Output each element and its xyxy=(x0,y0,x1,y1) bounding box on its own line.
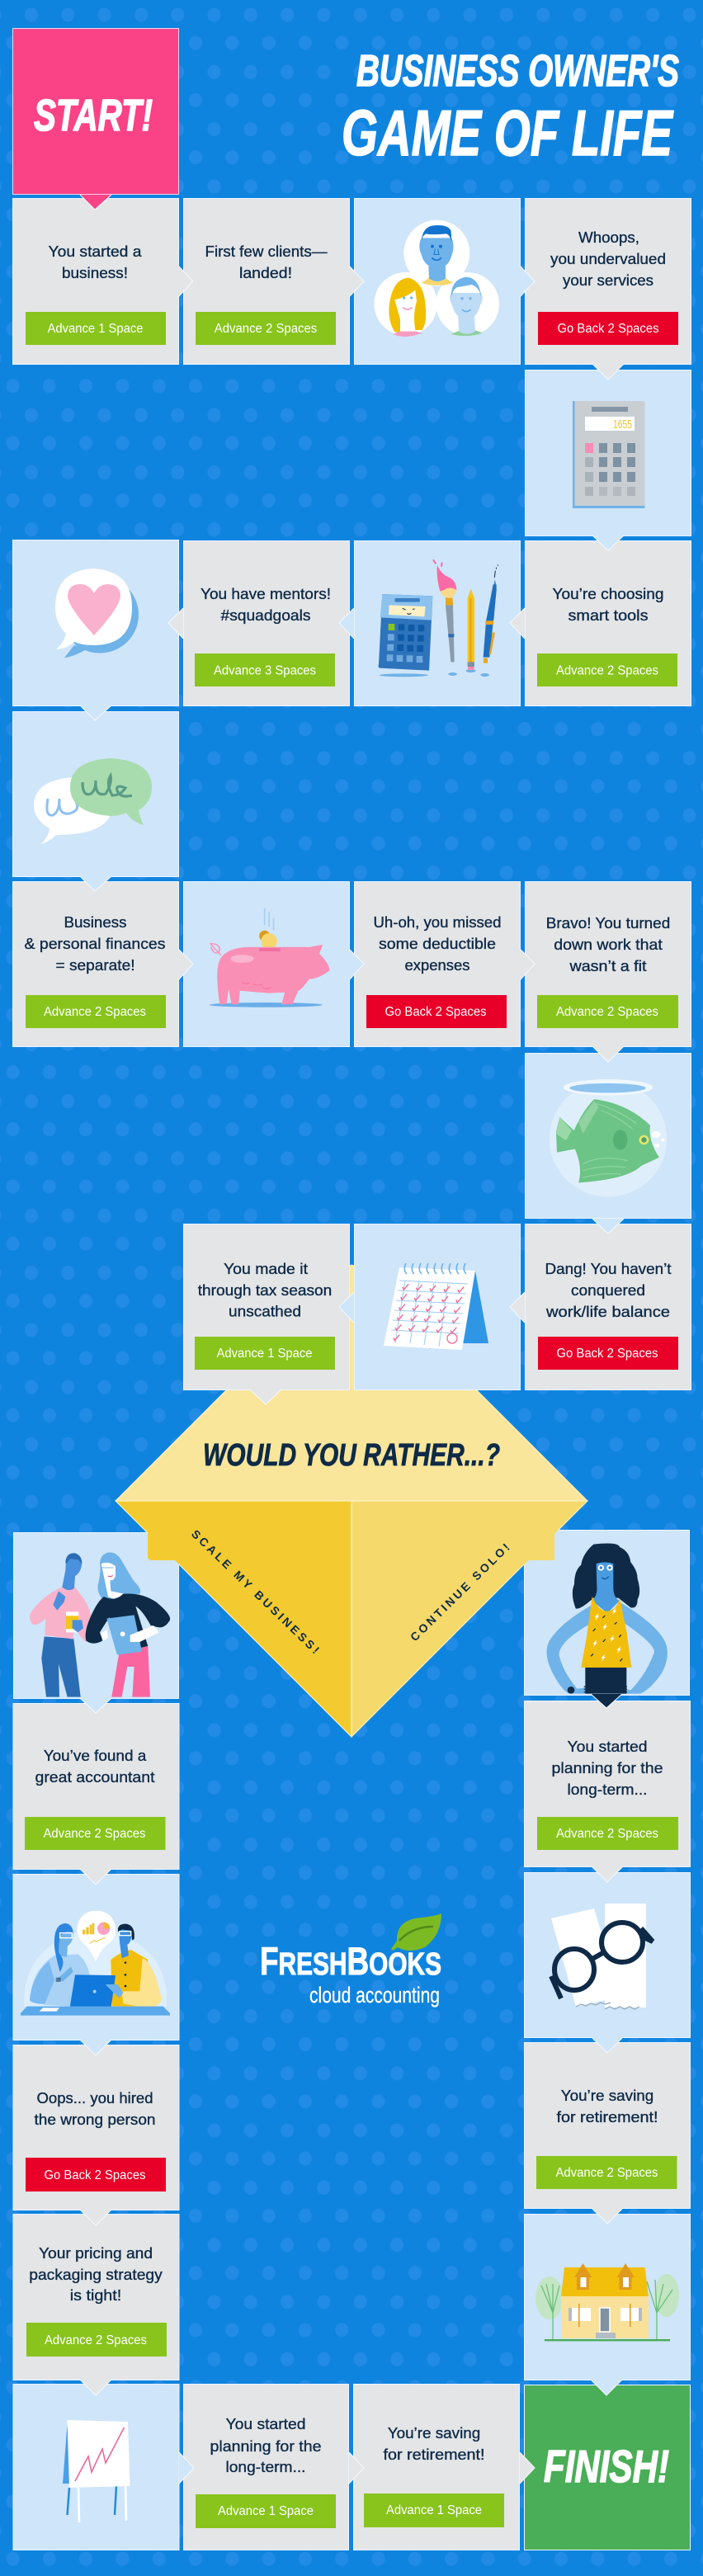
panel: first few clients xyxy=(183,198,350,365)
panel: you started a business: You started a xyxy=(48,243,143,260)
panel: made it through tax season: through tax season xyxy=(198,1282,332,1299)
panel: great accountant: great accountant xyxy=(35,1769,155,1786)
panel: woman illustration xyxy=(525,1530,690,1695)
panel: saving for retirement bottom xyxy=(353,2385,520,2550)
panel: missed deductible expenses xyxy=(355,881,520,1046)
panel: long-term planning: Advance 2 Spaces xyxy=(556,1827,658,1841)
panel: you started a business: business! xyxy=(62,265,128,281)
panel: missed deductible expenses: Uh-oh, you missed xyxy=(373,914,502,931)
panel: pricing and packaging: is tight! xyxy=(70,2287,121,2304)
panel: whoops undervalued xyxy=(525,198,691,365)
panel: logo: cloud accounting xyxy=(309,1983,440,2007)
panel: calculator illustration: 1655 xyxy=(613,418,632,432)
panel: long-term planning bottom: You started xyxy=(226,2416,305,2432)
panel: growth chart illustration xyxy=(13,2385,179,2550)
panel: turned down work: Advance 2 Spaces xyxy=(556,1005,658,1019)
panel: heart bubble illustration xyxy=(13,540,178,706)
panel: made it through tax season xyxy=(183,1224,354,1389)
panel: you started a business xyxy=(13,198,178,365)
panel: finish: FINISH! xyxy=(544,2441,669,2492)
panel: missed deductible expenses: Go Back 2 Spaces xyxy=(385,1005,487,1019)
panel: hired wrong person xyxy=(13,2045,179,2210)
panel: work/life balance: Go Back 2 Spaces xyxy=(556,1347,658,1361)
panel: start: START! xyxy=(34,91,153,140)
panel: turned down work: down work that xyxy=(554,937,663,953)
panel: yellow diamond overlap: SCALE MY BUSINESS! xyxy=(189,1527,322,1656)
title xyxy=(342,46,679,169)
panel: great accountant xyxy=(13,1703,179,1870)
panel: you have mentors: You have mentors! xyxy=(201,586,331,602)
panel: saving for retirement bottom: for retirement! xyxy=(383,2446,485,2463)
panel: logo xyxy=(260,1913,441,2007)
panel: fish bowl illustration xyxy=(525,1053,691,1218)
panel: long-term planning bottom xyxy=(183,2385,348,2550)
panel: long-term planning bottom: long-term... xyxy=(226,2459,305,2475)
panel: long-term planning: long-term... xyxy=(568,1781,647,1798)
panel: business and personal finances: = separate! xyxy=(56,957,135,974)
panel: hired wrong person: the wrong person xyxy=(35,2111,155,2128)
panel: business and personal finances: & personal finances xyxy=(25,936,165,952)
arrows xyxy=(80,195,624,2484)
panel: smart tools illustration xyxy=(355,541,520,706)
panel: great accountant: Advance 2 Spaces xyxy=(43,1827,146,1841)
panel: first few clients: landed! xyxy=(239,265,292,281)
panel: whoops undervalued: Go Back 2 Spaces xyxy=(558,322,659,336)
panel: long-term planning bottom: Advance 1 Space xyxy=(218,2504,314,2518)
panel: saving for retirement bottom: You’re saving xyxy=(388,2425,480,2442)
panel: work/life balance: work/life balance xyxy=(545,1304,670,1320)
panel: saving for retirement xyxy=(525,2043,690,2208)
panel: business and personal finances: Advance 2 Spaces xyxy=(44,1005,146,1019)
panel: made it through tax season: unscathed xyxy=(229,1304,301,1320)
panel: made it through tax season: Advance 1 Space xyxy=(216,1347,312,1361)
panel: hired wrong person: Oops... you hired xyxy=(36,2090,153,2107)
panel: you have mentors: #squadgoals xyxy=(221,607,310,624)
panel: long-term planning bottom: planning for the xyxy=(210,2438,322,2455)
panel: colleagues illustration xyxy=(13,1533,178,1698)
panel: choosing smart tools: smart tools xyxy=(568,607,649,624)
panel: choosing smart tools xyxy=(525,541,691,706)
panel: pricing and packaging: Your pricing and xyxy=(39,2245,153,2262)
panel: would you rather diamond xyxy=(116,1265,587,1737)
panel: long-term planning xyxy=(525,1701,690,1866)
panel: first few clients: First few clients— xyxy=(205,243,327,260)
panel: work/life balance: Dang! You haven’t xyxy=(545,1261,672,1277)
panel: logo: FRESHBOOKS xyxy=(260,1939,441,1983)
panel: missed deductible expenses: some deductible xyxy=(379,936,496,952)
panel: saving for retirement: for retirement! xyxy=(556,2109,658,2125)
panel: work/life balance xyxy=(525,1224,691,1389)
panel: whoops undervalued: Whoops, xyxy=(578,229,639,246)
panel: piggy bank illustration xyxy=(183,881,350,1046)
panel: made it through tax season: You made it xyxy=(224,1261,308,1277)
panel: pricing and packaging: Advance 2 Spaces xyxy=(45,2333,147,2347)
panel: glasses illustration xyxy=(525,1873,690,2038)
panel: calendar illustration xyxy=(355,1224,520,1389)
panel: you started a business: Advance 1 Space xyxy=(48,322,144,336)
panel: pricing and packaging xyxy=(13,2215,179,2380)
panel: pricing and packaging: packaging strategy xyxy=(29,2267,163,2283)
panel: finish xyxy=(525,2385,690,2550)
panel: house illustration xyxy=(525,2215,690,2380)
panel: first few clients: Advance 2 Spaces xyxy=(215,322,317,336)
panel: you have mentors: Advance 3 Spaces xyxy=(214,663,316,678)
panel: whoops undervalued: your services xyxy=(563,272,653,289)
panel: meeting illustration xyxy=(13,1875,179,2040)
panel: calculator illustration xyxy=(525,370,691,536)
panel: work/life balance: conquered xyxy=(571,1282,645,1299)
panel: people illustration xyxy=(355,198,520,365)
panel: choosing smart tools: Advance 2 Spaces xyxy=(556,663,658,678)
panel: turned down work xyxy=(525,881,691,1046)
panel: saving for retirement: Advance 2 Spaces xyxy=(556,2166,658,2180)
panel: long-term planning: planning for the xyxy=(551,1760,663,1776)
panel: would you rather diamond: WOULD YOU RATHER...? xyxy=(203,1438,500,1473)
panel: business and personal finances: Business xyxy=(64,914,127,931)
panel: saving for retirement bottom: Advance 1 Space xyxy=(386,2503,482,2517)
panel: missed deductible expenses: expenses xyxy=(404,957,470,974)
panel: speech bubbles illustration xyxy=(13,711,178,876)
panel: start xyxy=(13,28,178,195)
panel: hired wrong person: Go Back 2 Spaces xyxy=(45,2168,146,2182)
panel: yellow diamond overlap xyxy=(116,1501,587,1737)
panel: long-term planning: You started xyxy=(568,1739,647,1755)
panel: choosing smart tools: You’re choosing xyxy=(553,586,663,602)
panel: great accountant: You’ve found a xyxy=(44,1748,147,1764)
panel: you have mentors xyxy=(183,541,350,706)
panel: turned down work: Bravo! You turned xyxy=(546,915,670,932)
panel: business and personal finances xyxy=(13,881,178,1046)
panel: saving for retirement: You’re saving xyxy=(561,2088,653,2104)
panel: yellow diamond overlap: CONTINUE SOLO! xyxy=(408,1540,512,1644)
panel: whoops undervalued: you undervalued xyxy=(550,251,666,267)
panel: turned down work: wasn’t a fit xyxy=(569,958,647,974)
